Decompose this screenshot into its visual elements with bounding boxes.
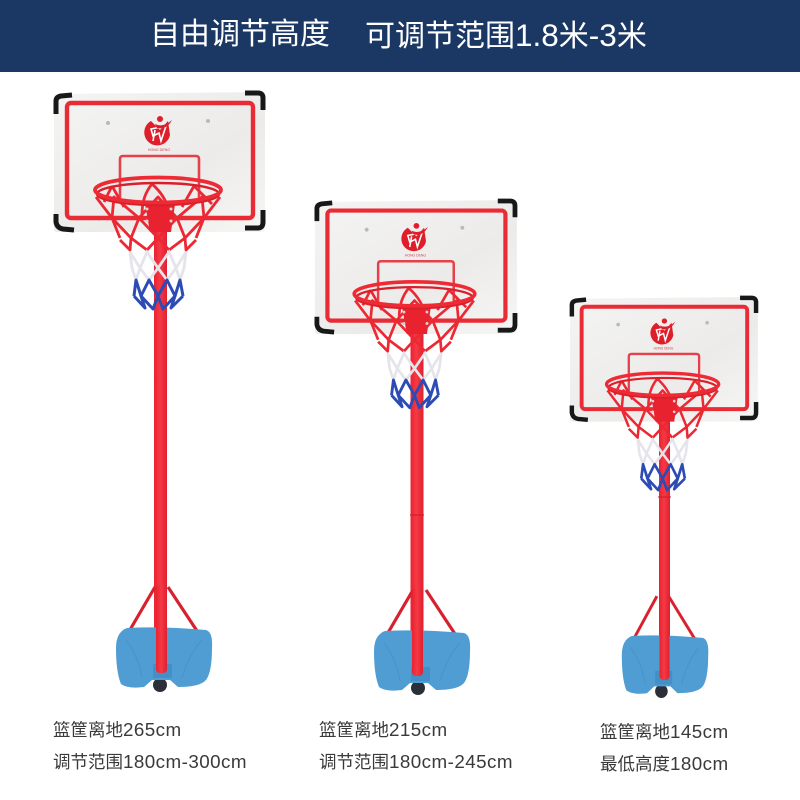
pole and base 2 — [374, 325, 470, 695]
backboard 2: HONG DENG — [405, 254, 426, 258]
stand 2: middle hoop — [315, 200, 517, 695]
backboard 2 — [315, 200, 517, 334]
caption: stand 2: 调节范围180cm-245cm — [319, 751, 513, 772]
hoop and net 3 — [607, 373, 719, 490]
backboard 3: HONG DENG — [654, 346, 674, 350]
pole and base 1 — [116, 225, 212, 692]
caption: stand 3: 篮筐离地145cm — [600, 721, 729, 742]
caption: stand 1: 调节范围180cm-300cm — [53, 751, 247, 772]
stand 1: tallest hoop — [54, 92, 265, 692]
title bar: 自由调节高度 — [150, 18, 330, 51]
title bar: 可调节范围1.8米-3米 — [365, 17, 647, 53]
caption: stand 3 — [600, 721, 729, 774]
backboard 3 — [570, 297, 758, 422]
title bar — [0, 0, 800, 72]
hoop and net 2 — [354, 282, 475, 408]
backboard 1 — [54, 92, 265, 232]
caption: stand 2: 篮筐离地215cm — [319, 719, 448, 740]
backboard 1: HONG DENG — [148, 148, 170, 152]
caption: stand 3: 最低高度180cm — [600, 753, 729, 774]
caption: stand 1: 篮筐离地265cm — [53, 719, 182, 740]
hoop and net 1 — [95, 178, 221, 309]
caption: stand 1 — [53, 719, 247, 772]
pole and base 3 — [622, 415, 708, 698]
caption: stand 2 — [319, 719, 513, 772]
stand 3: lowest hoop — [570, 297, 758, 698]
